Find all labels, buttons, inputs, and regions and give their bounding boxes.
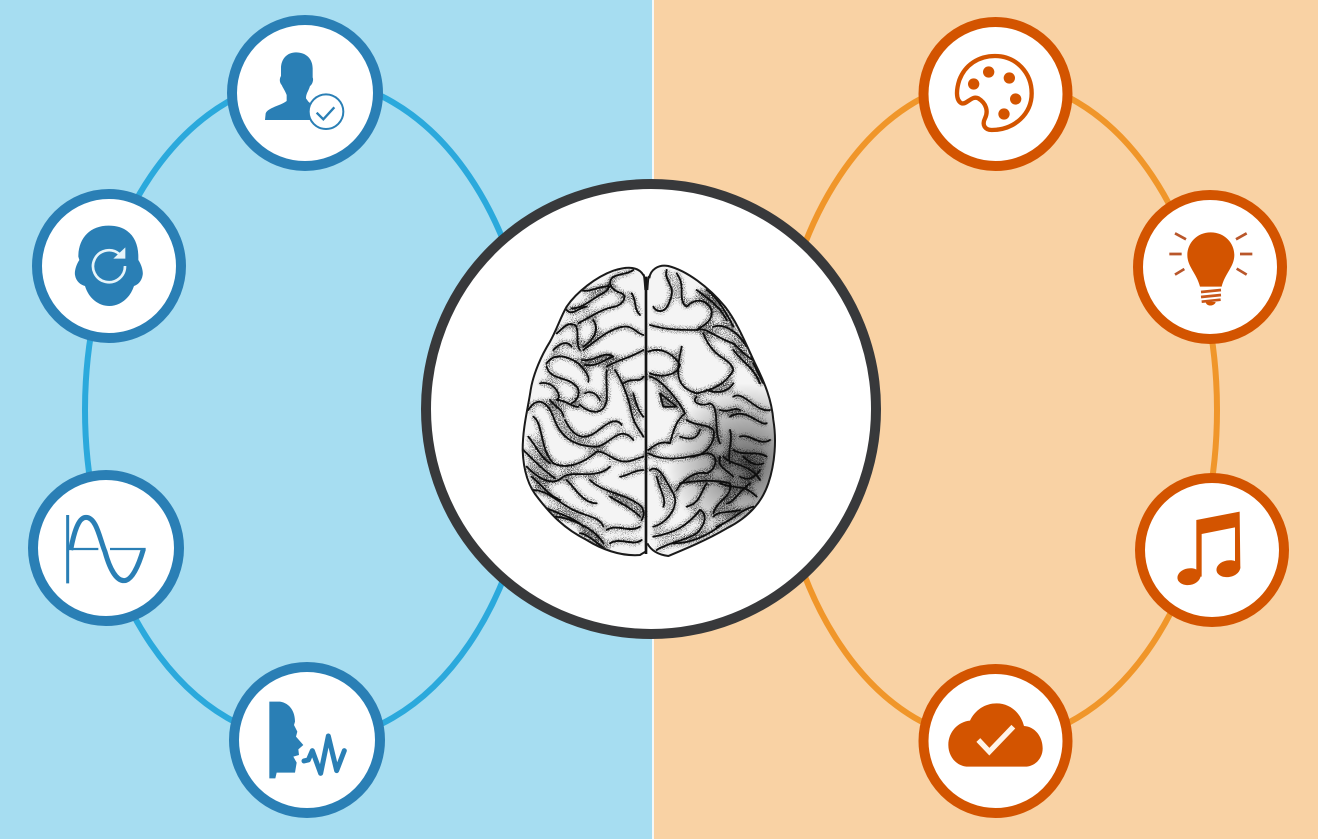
icon: music note	[1176, 512, 1242, 587]
right ring connecting icons	[775, 79, 1217, 741]
left ring connecting icons	[85, 79, 535, 741]
icon: person check	[265, 52, 343, 129]
icon node: sine wave	[33, 475, 179, 621]
midline fissure	[642, 277, 650, 554]
icon node: person with check	[232, 20, 378, 166]
icon: sine wave	[68, 515, 146, 583]
central circle with brain	[426, 184, 876, 634]
divider	[652, 0, 654, 839]
icon: speaking face	[269, 702, 344, 778]
hemisphere outlines	[523, 266, 775, 556]
icon: palette	[957, 56, 1032, 130]
icon node: music note	[1140, 478, 1284, 622]
panel: right side background	[654, 0, 1318, 839]
icon node: head with refresh	[37, 194, 181, 338]
icon: light bulb	[1169, 232, 1252, 306]
brain illustration	[517, 260, 783, 560]
icon node: palette	[924, 22, 1068, 166]
icon node: light bulb	[1138, 195, 1282, 339]
icon: head refresh	[75, 226, 143, 306]
icon: cloud check	[948, 703, 1043, 767]
icon node: speaking face	[234, 667, 380, 813]
panel: left side background	[0, 0, 652, 839]
icon node: cloud check	[924, 669, 1068, 813]
